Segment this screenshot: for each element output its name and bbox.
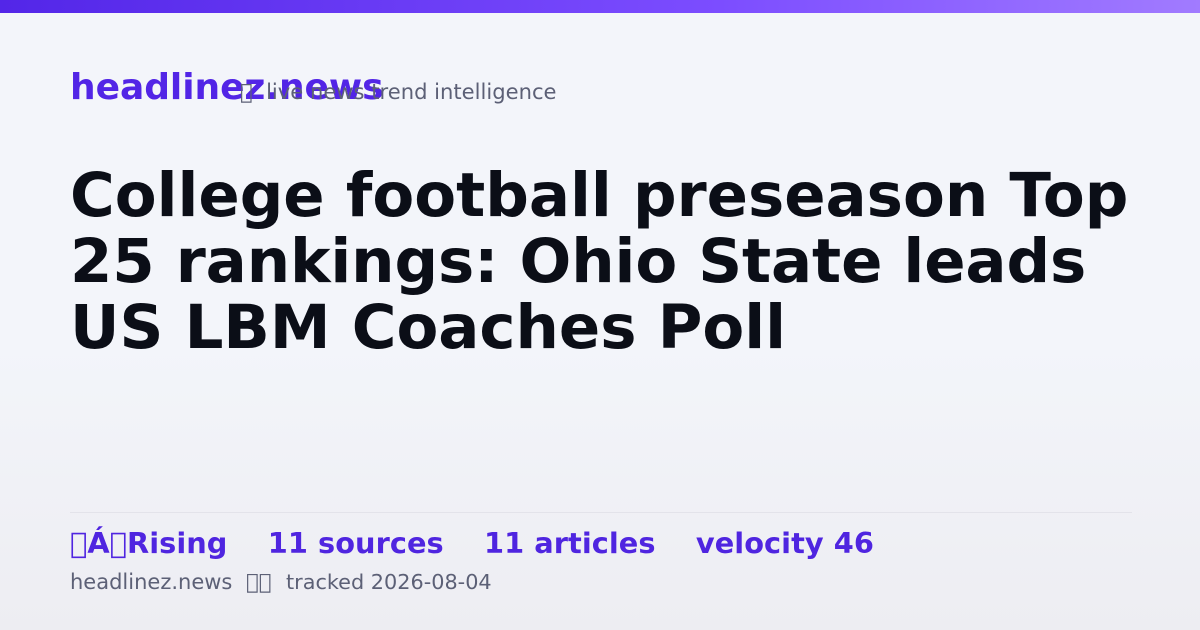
headline [70,160,1128,363]
headline: US LBM Coaches Poll [70,292,786,363]
footer line: headlinez.news [70,570,232,594]
footer line: tracked 2026-08-04 [286,570,492,594]
top gradient bar [0,0,1200,13]
stats row: ÁRising 11 sources 11 articles velocity 46 [70,526,874,560]
footer line [70,570,492,595]
tagline:  live news trend intelligence [240,79,557,104]
footer line:  [246,570,272,595]
headline: 25 rankings: Ohio State leads [70,226,1086,297]
headline: College football preseason Top [70,160,1128,231]
divider [70,512,1132,513]
brand logo: headlinez.news [70,67,384,108]
